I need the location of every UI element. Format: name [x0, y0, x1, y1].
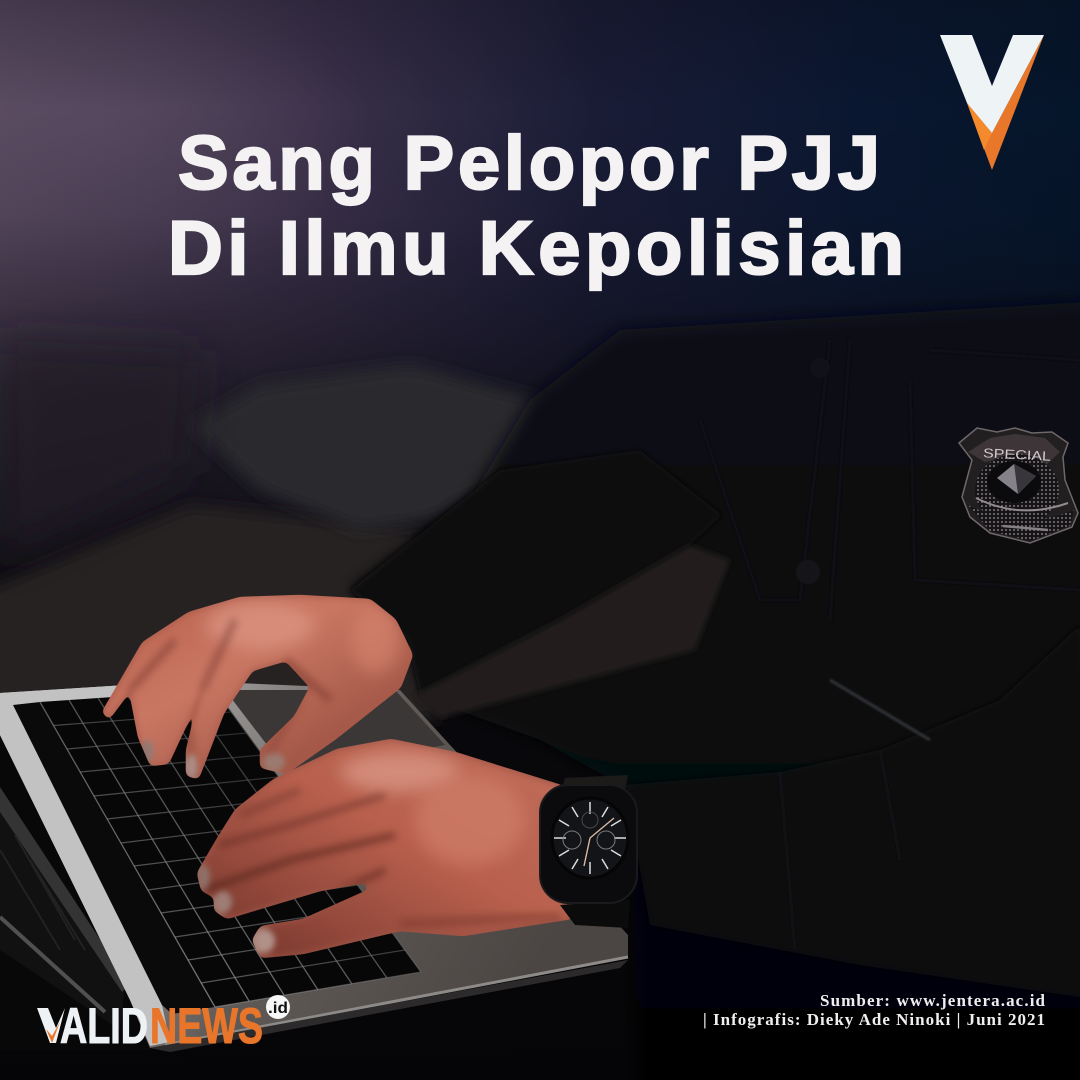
blurred photo background: bed and pillow	[0, 340, 540, 720]
logo: VALIDNEWS.id: .id	[268, 1000, 288, 1017]
logo: VALIDNEWS.id: NEWS	[150, 998, 263, 1054]
icon: police badge	[959, 428, 1078, 543]
title: Sang Pelopor PJJ	[178, 121, 880, 206]
laptop deck	[0, 681, 628, 1052]
source credit: Sumber: www.jentera.ac.id	[820, 991, 1046, 1010]
icon: police badge: SPECIAL	[983, 445, 1051, 464]
laptop screen and hinge	[0, 730, 150, 1050]
upper hand	[103, 596, 412, 780]
logo: VALIDNEWS.id	[37, 995, 290, 1054]
logo: V mark	[940, 35, 1044, 170]
logo: VALIDNEWS.id: ALID	[60, 998, 148, 1054]
lower hand	[198, 740, 572, 957]
source credit: | Infografis: Dieky Ade Ninoki | Juni 2021	[703, 1010, 1045, 1029]
title: Di Ilmu Kepolisian	[168, 206, 904, 291]
wristwatch	[540, 775, 637, 928]
laptop keyboard	[13, 690, 421, 1014]
source credit	[703, 991, 1046, 1029]
title	[168, 121, 904, 291]
person: dark shirt and sleeves	[350, 300, 1080, 1080]
